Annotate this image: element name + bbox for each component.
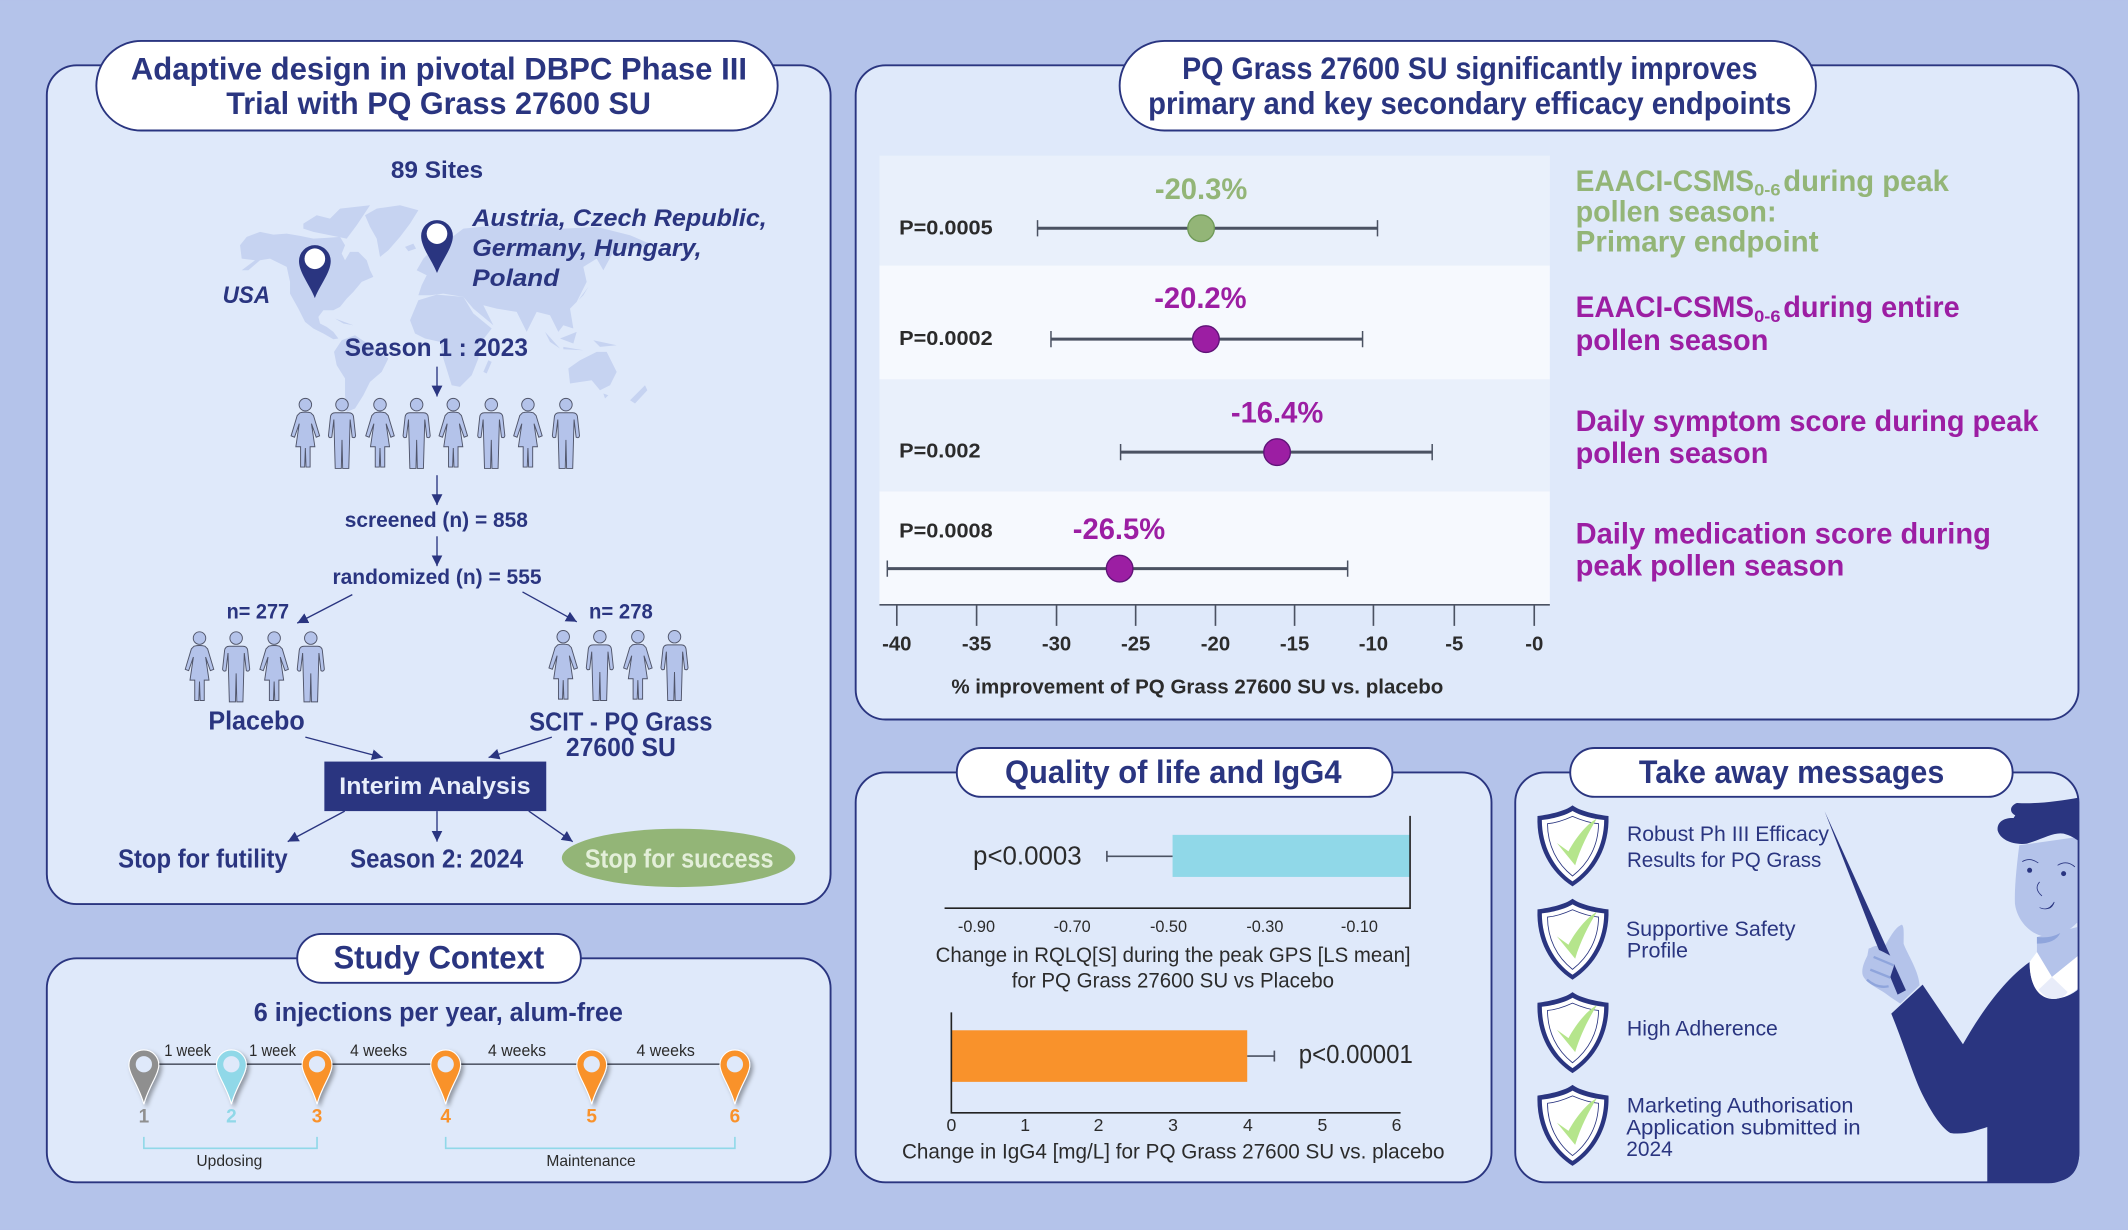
tick labels: 6	[1392, 1115, 1402, 1135]
title pill: Trial with PQ Grass 27600 SU	[226, 86, 651, 121]
axis tick labels: -40	[882, 633, 912, 655]
message 3: High Adherence	[1627, 1017, 1778, 1040]
active label	[529, 708, 713, 762]
stop for success: Stop for success	[585, 845, 774, 873]
injection pin 6	[720, 1050, 750, 1128]
tick labels: 5	[1317, 1115, 1327, 1135]
panel frame	[47, 958, 831, 1182]
endpoint 4 text: Daily medication score during	[1576, 518, 1991, 551]
heading pill: Take away messages	[1639, 754, 1944, 790]
caption: for PQ Grass 27600 SU vs Placebo	[1012, 970, 1334, 993]
arrow	[522, 592, 577, 622]
active label: SCIT - PQ Grass	[529, 708, 713, 736]
chart: IgG4	[902, 1012, 1445, 1164]
panel frame	[856, 772, 1492, 1182]
heading pill	[1570, 748, 2013, 797]
injection pin 1	[129, 1050, 159, 1128]
subheading: 6 injections per year, alum-free	[254, 999, 623, 1027]
randomized: randomized (n) = 555	[333, 566, 542, 589]
row 1 estimate: P=0.0005	[899, 217, 993, 239]
heading pill	[957, 748, 1392, 797]
injection pin 6: 6	[730, 1107, 740, 1128]
bracket: maintenance: Maintenance	[546, 1153, 636, 1170]
endpoint 1 text: 0-6	[1754, 182, 1781, 200]
endpoint 2 text	[1576, 291, 1960, 357]
arrow	[529, 811, 573, 842]
active label: 27600 SU	[566, 734, 676, 762]
bar	[951, 1030, 1247, 1082]
panel: quality of life	[856, 748, 1492, 1182]
endpoint 1 text: Primary endpoint	[1576, 225, 1819, 258]
injection pin 3	[302, 1050, 332, 1128]
title pill	[96, 41, 778, 130]
endpoint 4 text	[1576, 518, 1991, 583]
stop for success	[562, 829, 795, 887]
error bar	[1247, 1051, 1274, 1062]
row 2 estimate: -20.2%	[1154, 283, 1247, 315]
label: European countries: Austria, Czech Republic,	[471, 205, 767, 232]
icon: shield 1	[1537, 805, 1609, 886]
row 4 estimate: P=0.0008	[899, 521, 993, 543]
interval labels: 4 weeks	[637, 1042, 695, 1060]
interim analysis box: Interim Analysis	[339, 773, 531, 800]
message 4: Application submitted in	[1626, 1116, 1861, 1139]
injection pin 1: 1	[139, 1107, 150, 1128]
sites count: 89 Sites	[391, 157, 483, 184]
axes	[951, 1012, 1401, 1113]
endpoint 2 text: 0-6	[1754, 308, 1781, 326]
injection pin 4: 4	[440, 1107, 451, 1128]
n placebo: n= 277	[227, 600, 289, 623]
illustration: presenter	[1825, 798, 2079, 1182]
endpoint 1 text	[1576, 165, 1949, 258]
message 2	[1626, 918, 1796, 963]
panel: adaptive design	[47, 41, 831, 904]
arrow	[297, 595, 352, 623]
caption: Change in RQLQ[S] during the peak GPS [LS mean]	[936, 944, 1411, 967]
p value: p<0.0003	[973, 842, 1082, 870]
message 2: Supportive Safety	[1626, 918, 1796, 941]
interval labels: 4 weeks	[488, 1042, 546, 1060]
arrow	[436, 367, 438, 396]
axis tick labels: -30	[1042, 633, 1071, 655]
arrow	[489, 737, 552, 758]
row 1 estimate: -20.3%	[1155, 174, 1247, 206]
icon: shield 3	[1537, 992, 1609, 1073]
arrow	[436, 536, 438, 566]
tick labels: -0.10	[1341, 918, 1378, 936]
forest plot	[879, 156, 1550, 699]
tick labels: 0	[946, 1115, 956, 1135]
row 3 estimate	[899, 397, 1432, 465]
interval labels	[164, 1042, 695, 1060]
bracket: maintenance	[446, 1137, 735, 1170]
label: European countries: Germany, Hungary,	[472, 235, 702, 262]
arrow	[288, 811, 345, 842]
tick labels: 4	[1243, 1115, 1253, 1135]
axis tick labels: -5	[1445, 633, 1463, 655]
row 4 estimate	[887, 514, 1348, 582]
interval labels: 1 week	[249, 1042, 297, 1060]
endpoint 2 text: during entire	[1783, 291, 1960, 324]
panel: efficacy endpoints	[856, 41, 2078, 719]
people: screened cohort	[291, 398, 580, 468]
arrow	[436, 475, 438, 505]
stop for futility: Stop for futility	[118, 845, 288, 873]
endpoint 1 text: pollen season:	[1576, 195, 1777, 228]
endpoint 2 text: pollen season	[1576, 324, 1768, 357]
icon: Europe pin	[421, 220, 453, 273]
endpoint 2 text: EAACI-CSMS	[1576, 291, 1754, 324]
heading pill	[297, 934, 581, 983]
panel: study context	[47, 934, 831, 1182]
title pill	[1120, 41, 1816, 130]
tick labels: 3	[1168, 1115, 1178, 1135]
panel frame	[1515, 772, 2078, 1182]
label: USA: USA	[223, 282, 270, 309]
tick labels	[946, 1115, 1402, 1135]
icon: shield 4	[1537, 1085, 1609, 1166]
panel frame	[47, 65, 831, 904]
message 4	[1626, 1095, 1861, 1161]
injection pin 2	[216, 1050, 246, 1128]
n active: n= 278	[589, 600, 653, 623]
world map	[240, 205, 653, 412]
timeline line	[144, 1063, 736, 1065]
row 3 estimate: P=0.002	[899, 441, 981, 463]
axis tick labels	[882, 633, 1543, 655]
tick labels: -0.30	[1246, 918, 1283, 936]
endpoint 3 text	[1576, 405, 2039, 470]
axis tick labels: -25	[1121, 633, 1150, 655]
heading pill: Quality of life and IgG4	[1005, 754, 1342, 790]
season 2: Season 2: 2024	[350, 845, 524, 873]
row 1 estimate	[899, 174, 1378, 242]
message 1: Results for PQ Grass	[1627, 849, 1821, 872]
axes	[945, 816, 1410, 908]
interim analysis box	[324, 762, 546, 811]
injection pin 4	[431, 1050, 461, 1128]
message 4: Marketing Authorisation	[1627, 1095, 1853, 1118]
label: European countries: Poland	[472, 265, 560, 292]
row 2 estimate: P=0.0002	[899, 328, 993, 350]
endpoint 3 text: pollen season	[1576, 437, 1768, 470]
injection pin 3: 3	[312, 1107, 322, 1128]
endpoint 4 text: peak pollen season	[1576, 550, 1844, 583]
tick labels: -0.50	[1150, 918, 1187, 936]
tick labels: -0.70	[1054, 918, 1091, 936]
row 2 estimate	[899, 283, 1363, 352]
message 4: 2024	[1626, 1138, 1673, 1161]
arrow	[305, 737, 383, 758]
icon: USA pin	[299, 245, 331, 298]
people: placebo	[185, 632, 324, 702]
chart: RQLQ	[936, 816, 1411, 993]
message 1: Robust Ph III Efficacy	[1627, 823, 1830, 846]
p value: p<0.00001	[1299, 1041, 1413, 1069]
title pill: PQ Grass 27600 SU significantly improves	[1182, 51, 1758, 86]
icon: shield 2	[1537, 899, 1609, 980]
axis tick labels: -35	[962, 633, 991, 655]
tick labels: -0.90	[958, 918, 995, 936]
tick labels: 2	[1094, 1115, 1103, 1135]
caption: Change in IgG4 [mg/L] for PQ Grass 27600 SU vs. placebo	[902, 1141, 1445, 1164]
message 1	[1627, 823, 1830, 872]
endpoint 1 text: during peak	[1783, 165, 1949, 198]
error bar	[1107, 851, 1173, 862]
axis tick labels: -0	[1525, 633, 1543, 655]
bracket: updosing: Updosing	[196, 1153, 262, 1170]
endpoint 1 text: EAACI-CSMS	[1576, 165, 1754, 198]
heading pill: Study Context	[333, 940, 544, 976]
label: European countries	[471, 205, 767, 292]
placebo label: Placebo	[208, 708, 305, 736]
endpoint 3 text: Daily symptom score during peak	[1576, 405, 2039, 438]
row 3 estimate: -16.4%	[1231, 397, 1323, 429]
title pill: Adaptive design in pivotal DBPC Phase III	[131, 52, 747, 87]
tick labels: 1	[1020, 1115, 1030, 1135]
panel: take away messages	[1515, 748, 2079, 1182]
title pill: primary and key secondary efficacy endpoints	[1148, 86, 1791, 121]
message 2: Profile	[1627, 940, 1688, 963]
axis title: % improvement of PQ Grass 27600 SU vs. placebo	[951, 677, 1443, 699]
axis	[879, 605, 1550, 626]
arrow	[436, 811, 438, 842]
injection pin 5: 5	[586, 1107, 597, 1128]
injection pin 5	[577, 1050, 607, 1128]
row bands	[879, 156, 1550, 605]
bar	[1173, 835, 1410, 877]
axis tick labels: -10	[1359, 633, 1388, 655]
row 4 estimate: -26.5%	[1073, 514, 1165, 546]
axis tick labels: -15	[1280, 633, 1309, 655]
bracket: updosing	[144, 1137, 317, 1170]
interval labels: 1 week	[164, 1042, 212, 1060]
tick labels	[958, 918, 1378, 936]
season 1: Season 1 : 2023	[345, 334, 528, 362]
panel frame	[856, 65, 2078, 720]
screened: screened (n) = 858	[345, 509, 528, 532]
caption	[936, 944, 1411, 993]
injection pin 2: 2	[226, 1107, 237, 1128]
axis tick labels: -20	[1201, 633, 1230, 655]
interval labels: 4 weeks	[350, 1042, 407, 1060]
people: active	[549, 630, 688, 700]
